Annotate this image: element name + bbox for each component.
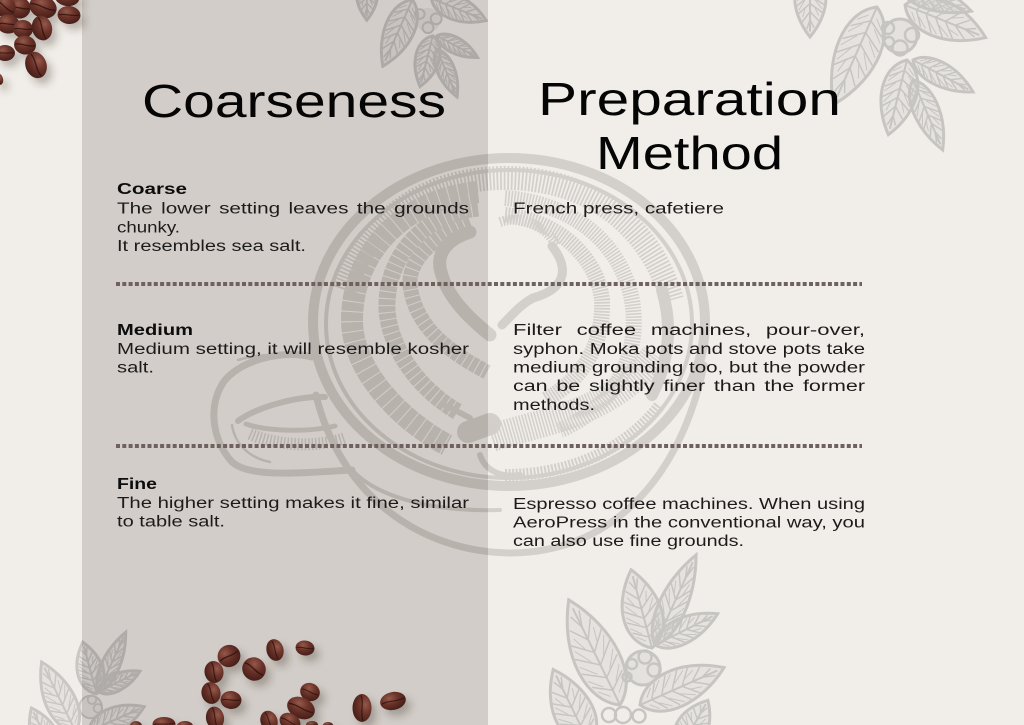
heading: Coarseness: Coarseness (142, 75, 446, 127)
text block: medium description: salt. (117, 360, 154, 377)
text block: fine preparation method (513, 496, 865, 550)
text block: medium description (117, 322, 469, 377)
coffee beans top left (0, 0, 81, 86)
text block: medium preparation method: Filter coffee machines, pour-over, (513, 322, 865, 339)
coffee beans bottom (130, 637, 408, 725)
text block: medium preparation method: can be slightly finer than the former (513, 378, 865, 395)
text block: medium preparation method: methods. (513, 397, 595, 414)
heading: Preparation Method (538, 73, 841, 179)
text block: fine description: Fine (117, 476, 157, 493)
text block: coarse description (117, 181, 469, 255)
illustration: coffee leaves bottom left (20, 629, 149, 725)
panel: coarseness column (82, 0, 488, 725)
text block: fine preparation method: AeroPress in the conventional way, you (513, 514, 865, 531)
text block: medium preparation method: medium grounding too, but the powder (513, 360, 865, 377)
text block: medium preparation method: syphon. Moka pots and stove pots take (513, 341, 865, 358)
text block: coarse preparation method: French press, cafetiere (513, 201, 724, 218)
text block: coarse description: chunky. (117, 219, 180, 236)
text block: medium description: Medium setting, it will resemble kosher (117, 341, 469, 358)
divider: second dotted line (116, 444, 862, 448)
illustration: coffee leaves bottom right (535, 549, 731, 725)
text block: fine preparation method: Espresso coffee machines. When using (513, 496, 865, 513)
illustration: coffee leaves top centre (356, 0, 491, 100)
text block: medium preparation method (513, 322, 865, 414)
text block: medium description: Medium (117, 322, 193, 339)
text block: coarse description: It resembles sea salt. (117, 238, 306, 255)
heading: Preparation Method: Method (596, 127, 783, 179)
illustration: coffee leaves top right (795, 0, 993, 155)
text block: coarse description: The lower setting leaves the grounds (117, 201, 469, 218)
text block: coarse description: Coarse (117, 181, 187, 198)
text block: fine description: to table salt. (117, 514, 225, 531)
heading: Preparation Method: Preparation (538, 73, 841, 125)
illustration: latte cup watermark (214, 158, 705, 553)
text block: fine description: The higher setting makes it fine, similar (117, 495, 469, 512)
text block: fine description (117, 476, 469, 531)
text block: fine preparation method: can also use fine grounds. (513, 533, 744, 550)
divider: first dotted line (116, 282, 862, 286)
